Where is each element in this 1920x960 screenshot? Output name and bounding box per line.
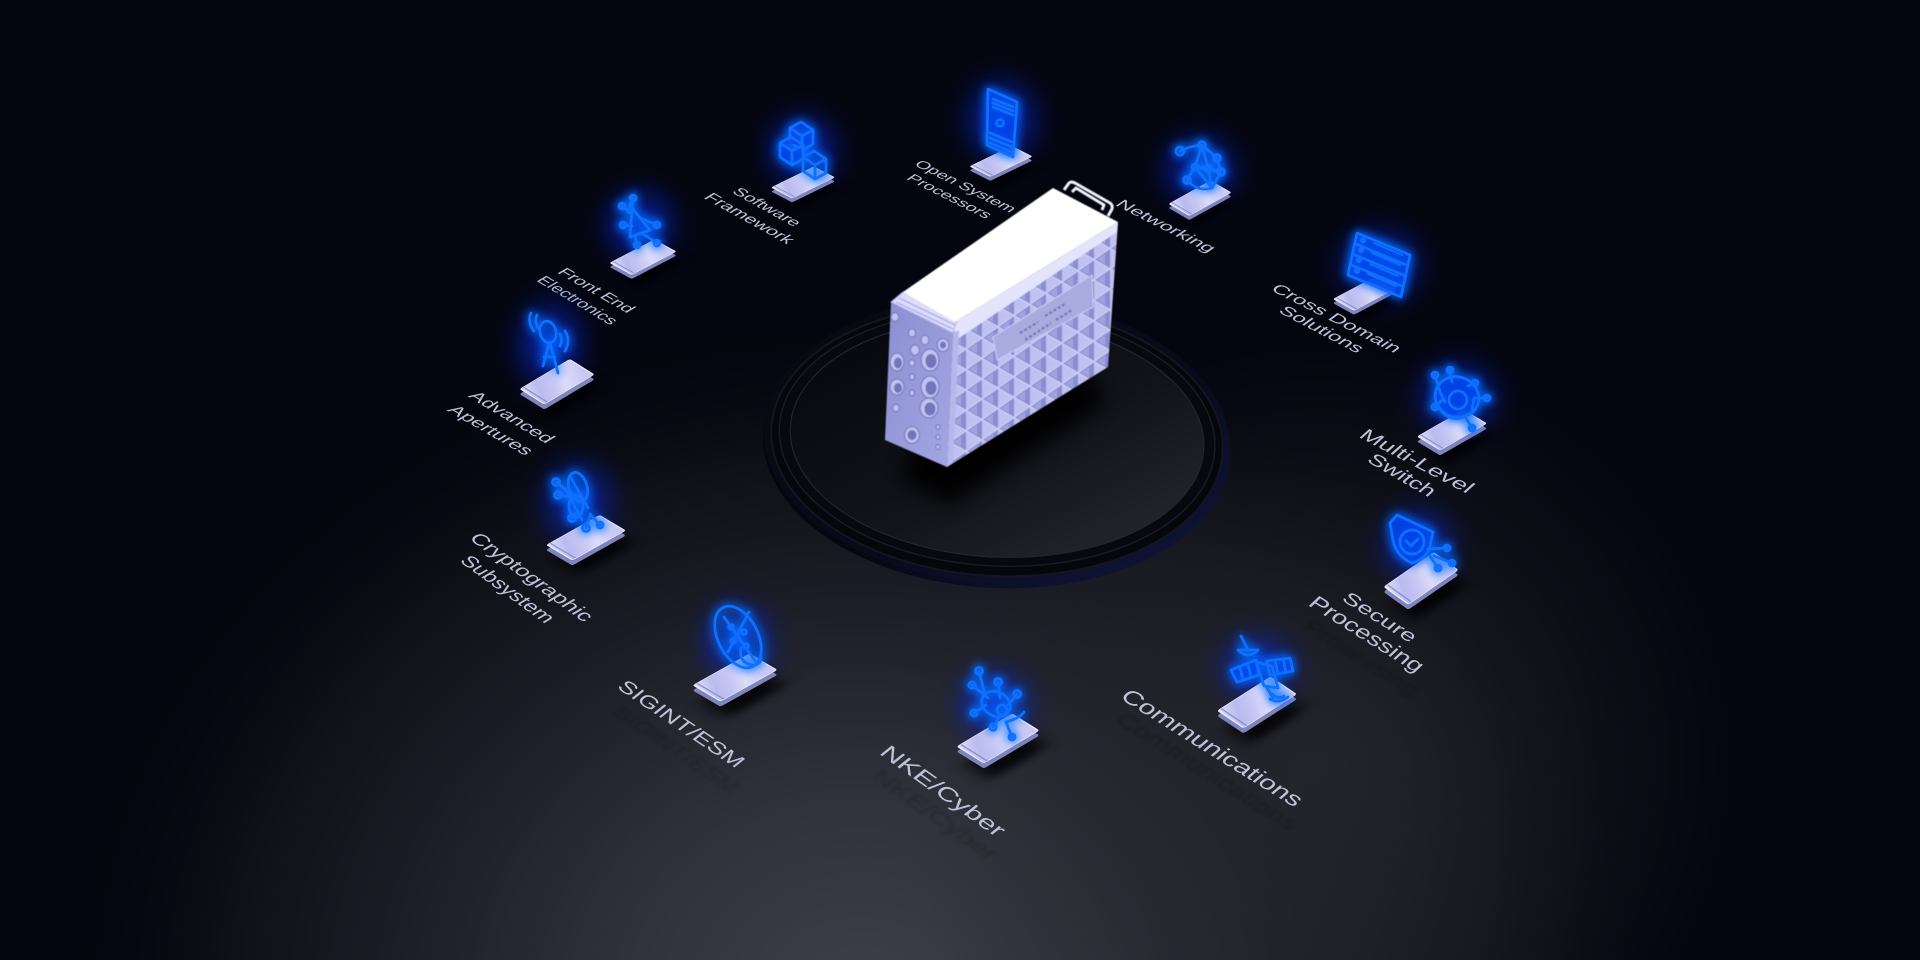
carry handle: [1064, 182, 1112, 216]
item: Cross Domain Solutions: [1266, 203, 1448, 356]
label: Processing: [1304, 592, 1430, 676]
label: Processing: [1299, 616, 1425, 700]
label: Multi-Level: [1355, 426, 1479, 497]
label: Solutions: [1274, 303, 1369, 356]
module: [692, 654, 778, 702]
white lid: [903, 188, 1118, 322]
item: Front End Electronics: [533, 165, 700, 327]
item: Cryptographic Subsystem: [455, 436, 638, 626]
icon: network mesh: [1176, 142, 1224, 189]
item: SIGINT/ESM: [608, 578, 798, 797]
label: Switch: [1363, 450, 1441, 500]
icon: radio tower: [530, 313, 568, 373]
item: Advanced Apertures: [443, 273, 608, 458]
right quilted face: [947, 222, 1118, 467]
label: Open System: [911, 158, 1021, 215]
label: SIGINT/ESM: [608, 702, 745, 797]
label: Front End: [553, 265, 640, 315]
item: Multi-Level Switch: [1355, 336, 1524, 500]
label: Cross Domain: [1266, 281, 1406, 356]
item: Software Framework: [700, 90, 863, 246]
label: Communications: [1115, 685, 1309, 811]
icon: signal disc: [705, 599, 771, 675]
label: SIGINT/ESM: [613, 676, 750, 771]
module: [1168, 180, 1232, 216]
module: [771, 166, 835, 198]
label: Apertures: [443, 403, 538, 458]
label: NKE/Cyber: [866, 766, 1003, 865]
label: Framework: [700, 190, 800, 246]
module: [1417, 410, 1487, 450]
label: Networking: [1112, 197, 1221, 255]
icon: stacked cubes: [780, 122, 826, 179]
icon: cyber eye: [969, 667, 1024, 740]
label: Advanced: [464, 389, 559, 446]
item: Secure Processing: [1299, 485, 1478, 700]
item: NKE/Cyber: [866, 645, 1057, 865]
icon: computer tower: [987, 89, 1017, 157]
platform disc: [756, 285, 1238, 600]
module: [546, 515, 626, 560]
module: [1217, 676, 1297, 728]
module: [1384, 552, 1459, 605]
main electronics unit: [885, 182, 1118, 467]
label: [443, 389, 559, 458]
module: [1333, 276, 1397, 311]
item: Networking: [1112, 110, 1262, 255]
icon: circuit shield: [1429, 367, 1490, 431]
label: Software: [728, 185, 806, 229]
label: Secure: [1337, 589, 1422, 646]
top rim: [891, 292, 957, 333]
module: [970, 146, 1032, 177]
main unit shadow: [900, 350, 1105, 505]
icon: antenna array circuit: [619, 195, 660, 248]
label: Electronics: [533, 273, 623, 327]
label: Communications: [1110, 709, 1304, 835]
item: Open System Processors: [903, 52, 1064, 221]
label: Subsystem: [455, 552, 560, 626]
label: Cryptographic: [464, 530, 599, 625]
icon: satellite: [1231, 636, 1293, 701]
module: [610, 240, 676, 275]
connector face: [885, 302, 953, 467]
label: NKE/Cyber: [874, 742, 1011, 841]
module: [520, 359, 595, 404]
icon: cryptographic knot: [552, 470, 603, 532]
plaque: [993, 275, 1093, 360]
icon: server racks: [1348, 233, 1410, 297]
label: Processors: [903, 172, 996, 221]
icon: shield with check: [1390, 515, 1455, 571]
label: [866, 742, 1011, 865]
module: [956, 714, 1040, 764]
item: Communications: [1110, 610, 1320, 835]
